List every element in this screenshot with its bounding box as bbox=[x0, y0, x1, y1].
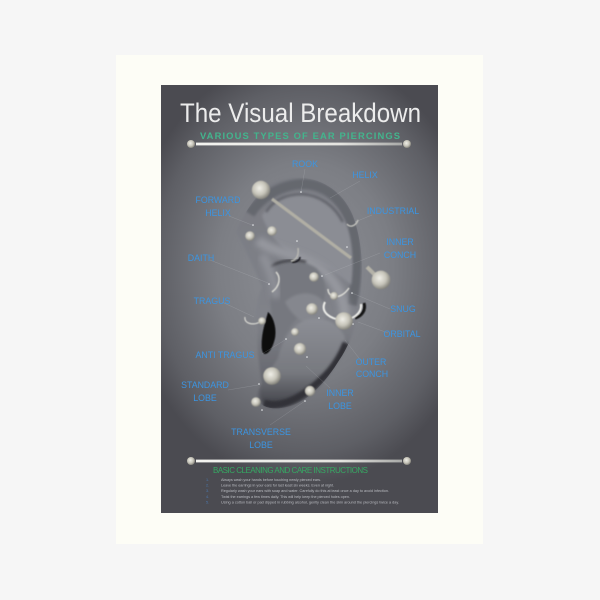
care instructions heading: BASIC CLEANING AND CARE INSTRUCTIONS bbox=[213, 466, 368, 475]
care instructions list: 4. bbox=[206, 495, 209, 499]
piercing labels: INNER bbox=[326, 388, 354, 398]
title: The Visual Breakdown bbox=[180, 98, 421, 128]
care instructions list: 5. bbox=[206, 500, 209, 504]
piercing labels: HELIX bbox=[352, 170, 378, 180]
piercing labels bbox=[181, 159, 421, 450]
ear canal bbox=[262, 312, 276, 354]
care instructions list: Regularly wash your ears with soap and water. Carefully do this at least once a day to avoid infection. bbox=[221, 489, 389, 493]
piercing labels: LOBE bbox=[328, 401, 352, 411]
piercing labels: TRANSVERSE bbox=[231, 427, 291, 437]
piercing labels: INNER bbox=[386, 237, 414, 247]
piercing: inner conch stud bbox=[309, 272, 319, 282]
piercing: tragus ring bbox=[245, 317, 266, 325]
piercing: industrial barbell bbox=[252, 181, 390, 289]
scapha inner depression bbox=[262, 192, 352, 285]
care instructions list: Always wash your hands before touching newly pierced ears. bbox=[221, 478, 321, 482]
piercing: helix ring bbox=[347, 220, 358, 226]
bottom divider bar bbox=[187, 457, 411, 465]
care instructions list bbox=[206, 478, 399, 504]
helix top band shading bbox=[250, 184, 356, 305]
piercing: snug ring bbox=[328, 288, 349, 300]
piercing: forward helix studs bbox=[245, 226, 277, 241]
piercing labels: CONCH bbox=[356, 369, 388, 379]
piercing labels: SNUG bbox=[390, 304, 416, 314]
antihelix highlight bbox=[258, 240, 345, 318]
subtitle: VARIOUS TYPES OF EAR PIERCINGS bbox=[200, 130, 400, 141]
leader lines and dots bbox=[210, 169, 390, 425]
piercing labels: LOBE bbox=[249, 440, 273, 450]
antitragus and lobe bbox=[260, 319, 345, 408]
piercing labels: ORBITAL bbox=[384, 329, 421, 339]
care instructions list: Using a cotton ball or pad dipped in rubbing alcohol, gently clean the skin around the piercings twice a day. bbox=[221, 500, 399, 504]
piercing labels: CONCH bbox=[384, 250, 416, 260]
piercing: rook ring bbox=[291, 248, 300, 262]
care instructions list: 1. bbox=[206, 478, 209, 482]
care instructions list: Twist the earrings a few times daily. This will help keep the pierced holes open. bbox=[221, 495, 350, 499]
piercing: anti-tragus and lobe studs bbox=[251, 328, 315, 407]
concha cavity bbox=[272, 262, 324, 320]
piercing labels: ANTI TRAGUS bbox=[196, 350, 255, 360]
piercing: orbital ring bbox=[306, 302, 365, 330]
piercing labels: TRAGUS bbox=[194, 296, 230, 306]
piercing labels: ROOK bbox=[292, 159, 318, 169]
ear outline bbox=[236, 178, 362, 408]
piercing labels: INDUSTRIAL bbox=[367, 206, 419, 216]
poster panel bbox=[161, 85, 438, 513]
care instructions list: 3. bbox=[206, 489, 209, 493]
piercing: daith ring bbox=[272, 272, 279, 292]
piercing labels: FORWARD bbox=[196, 195, 240, 205]
piercing labels: STANDARD bbox=[181, 380, 229, 390]
care instructions list: 2. bbox=[206, 484, 209, 488]
piercing labels: DAITH bbox=[188, 253, 214, 263]
piercing labels: HELIX bbox=[205, 208, 231, 218]
care instructions list: Leave the earrings in your ears for last least six weeks. Even at night. bbox=[221, 484, 334, 488]
piercing labels: LOBE bbox=[193, 393, 217, 403]
art print card bbox=[116, 55, 483, 544]
concha lower bowl bbox=[286, 294, 322, 318]
lobe dark underside bbox=[264, 343, 346, 404]
crus fold bbox=[262, 255, 276, 298]
ear illustration bbox=[236, 178, 362, 408]
piercing labels: OUTER bbox=[356, 357, 386, 367]
top divider bar bbox=[187, 140, 411, 148]
